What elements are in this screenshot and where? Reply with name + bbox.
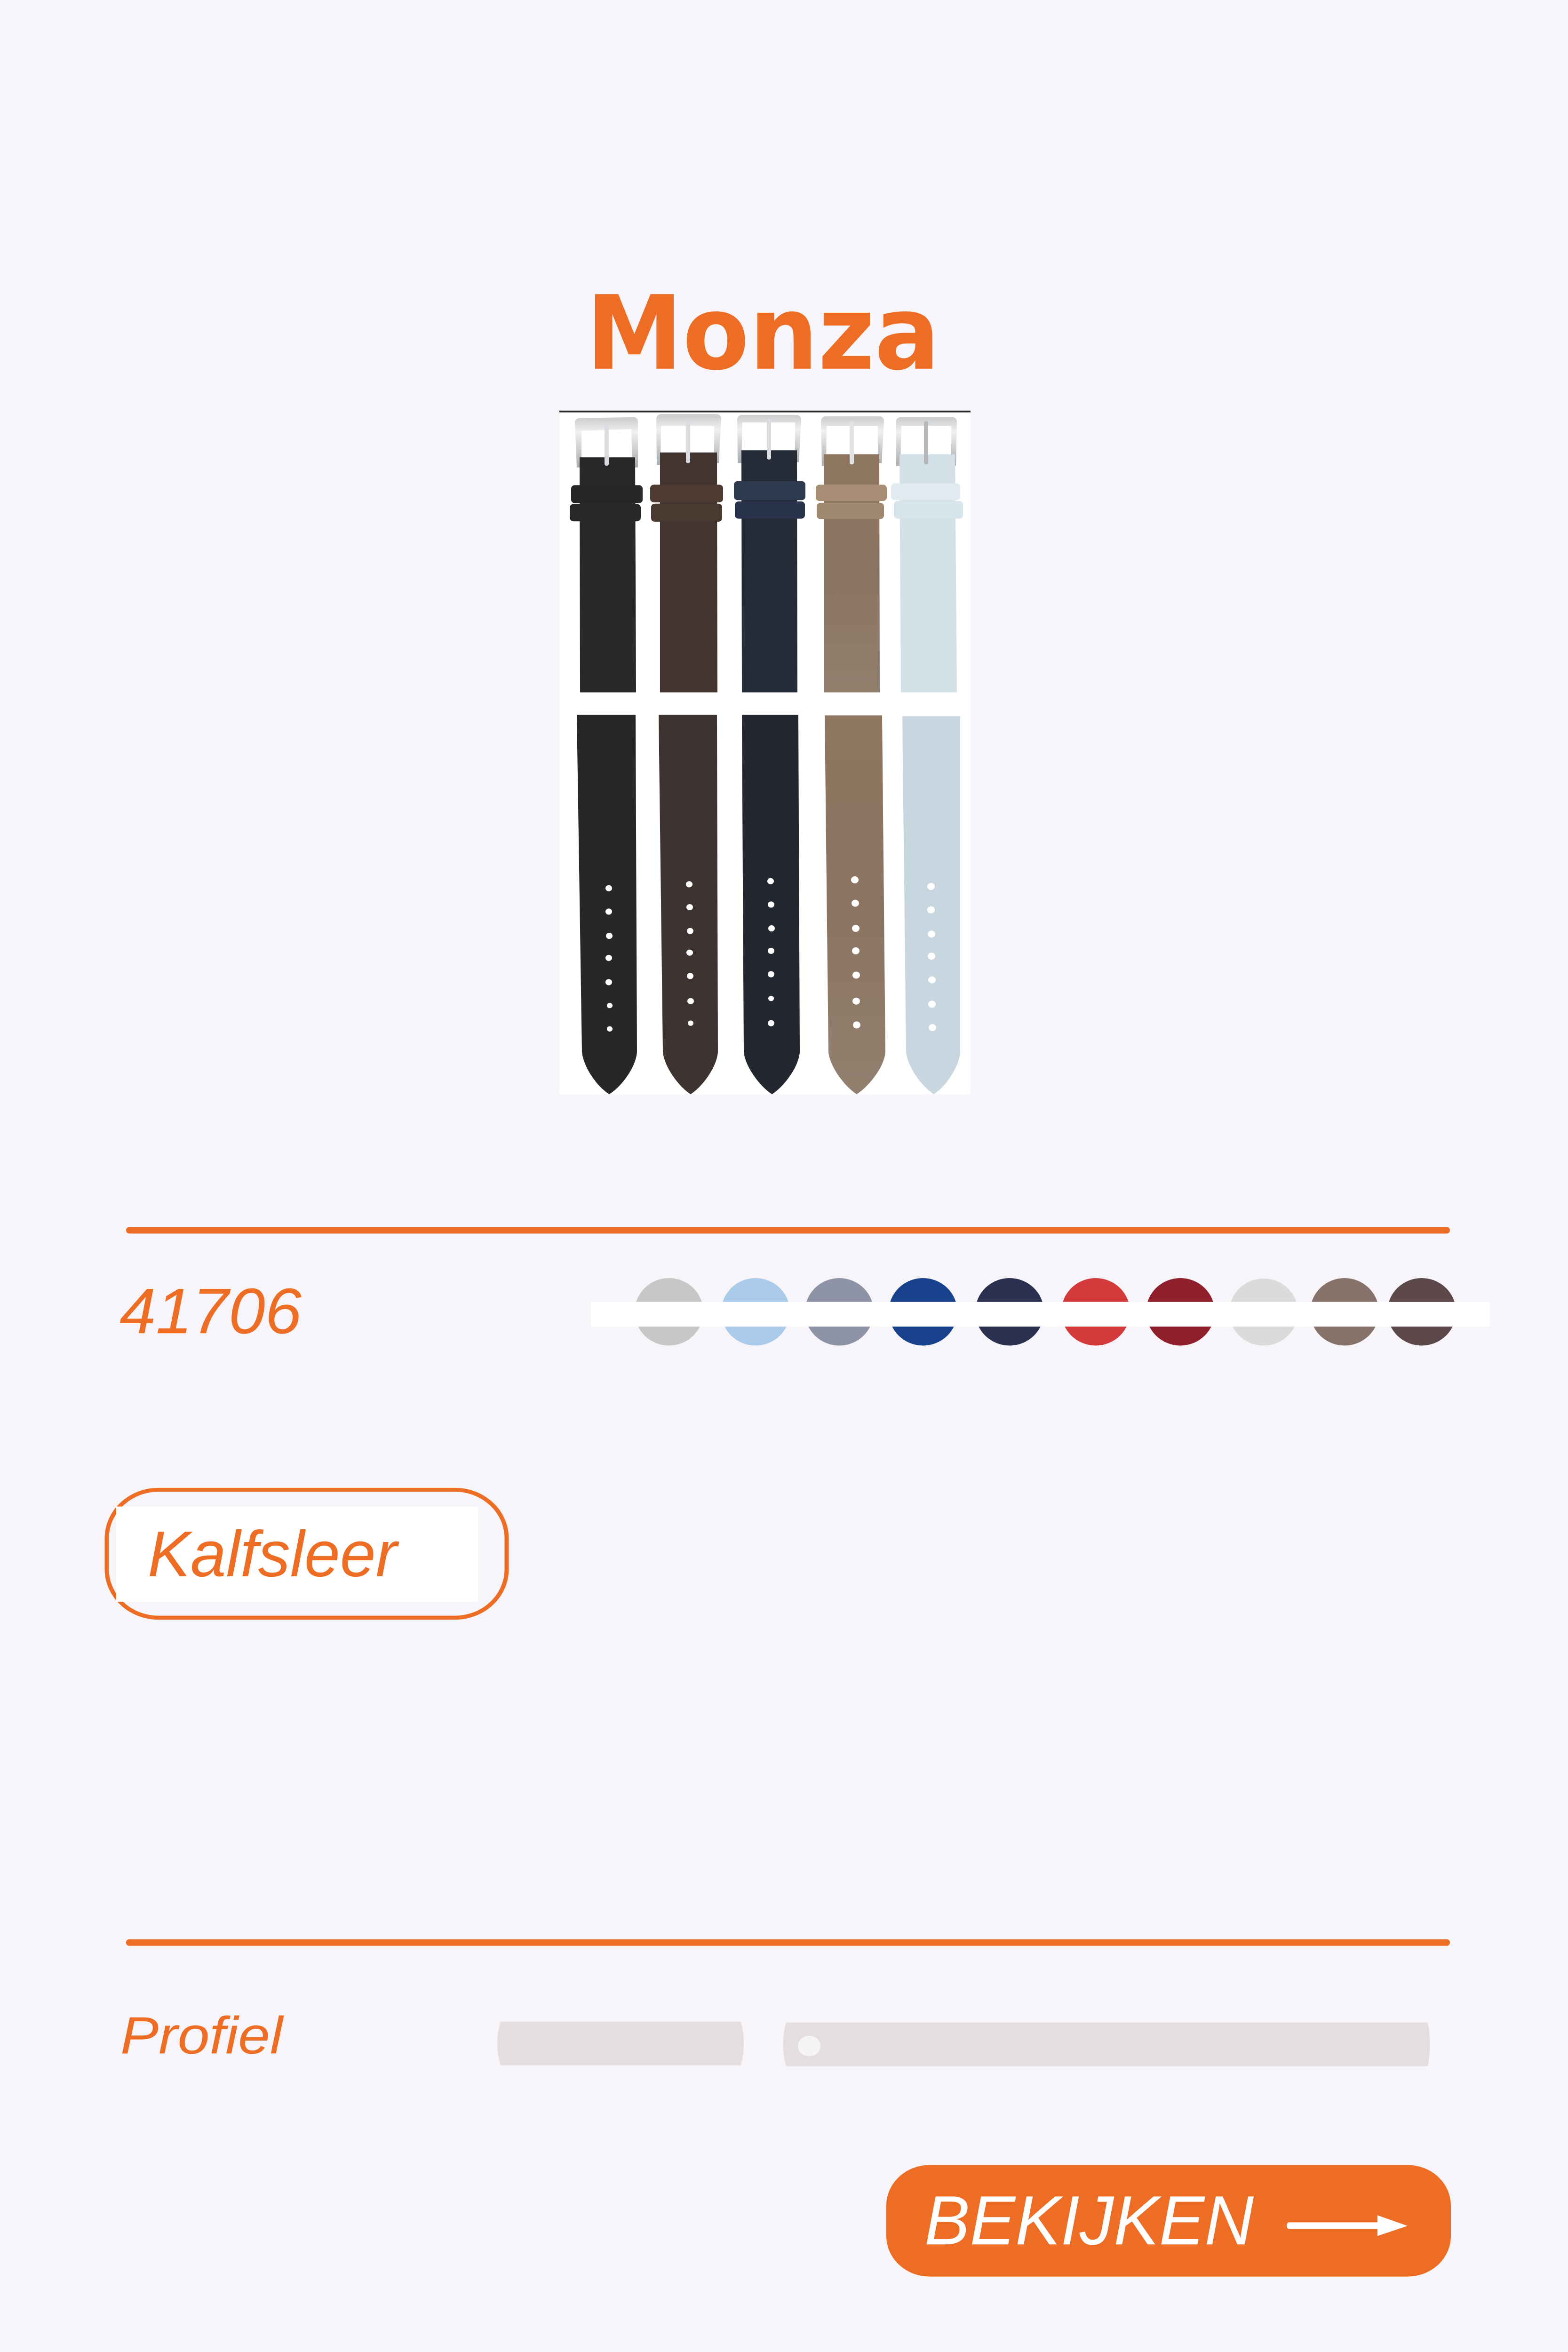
material tag: [107, 1490, 507, 1618]
bottom orange divider: [126, 1939, 1450, 1946]
long bar hole: [798, 2036, 820, 2056]
title: Monza: [586, 274, 940, 393]
tag label: Kalfsleer: [148, 1518, 399, 1590]
long bar body: [783, 2023, 1430, 2066]
view button: [886, 2165, 1451, 2277]
profile shape short: [497, 2022, 744, 2066]
button background: [886, 2165, 1451, 2277]
top orange divider: [126, 1227, 1450, 1233]
strap 3 navy upper with buckle: [734, 415, 805, 692]
colour swatches: [591, 1278, 1490, 1345]
photo top rule: [559, 411, 971, 413]
strap 2 brown upper with buckle: [650, 414, 723, 692]
strap 2 brown lower with holes: [659, 715, 718, 1094]
swatch circles: [635, 1278, 1456, 1345]
button label: BEKIJKEN: [924, 2182, 1254, 2259]
strap 5 white upper with buckle: [891, 417, 963, 692]
tag outline: [107, 1490, 507, 1618]
strap 4 taupe lower with holes: [825, 715, 885, 1094]
strap 4 taupe upper with buckle: [816, 416, 887, 692]
profile label: Profiel: [120, 2007, 285, 2065]
white band across swatches: [591, 1302, 1490, 1327]
strap 5 white lower with holes: [902, 716, 960, 1094]
product photo: five leather watch straps: [559, 411, 971, 1094]
tag white fill: [116, 1507, 478, 1602]
strap 1 black upper with buckle: [570, 417, 643, 692]
icon: arrow right: [1287, 2215, 1408, 2236]
strap 1 black lower with holes: [577, 715, 637, 1094]
photo panel: [559, 411, 971, 1094]
article number: 41706: [119, 1275, 302, 1347]
profile shape long: [783, 2023, 1430, 2066]
strap 3 navy lower with holes: [742, 715, 800, 1094]
